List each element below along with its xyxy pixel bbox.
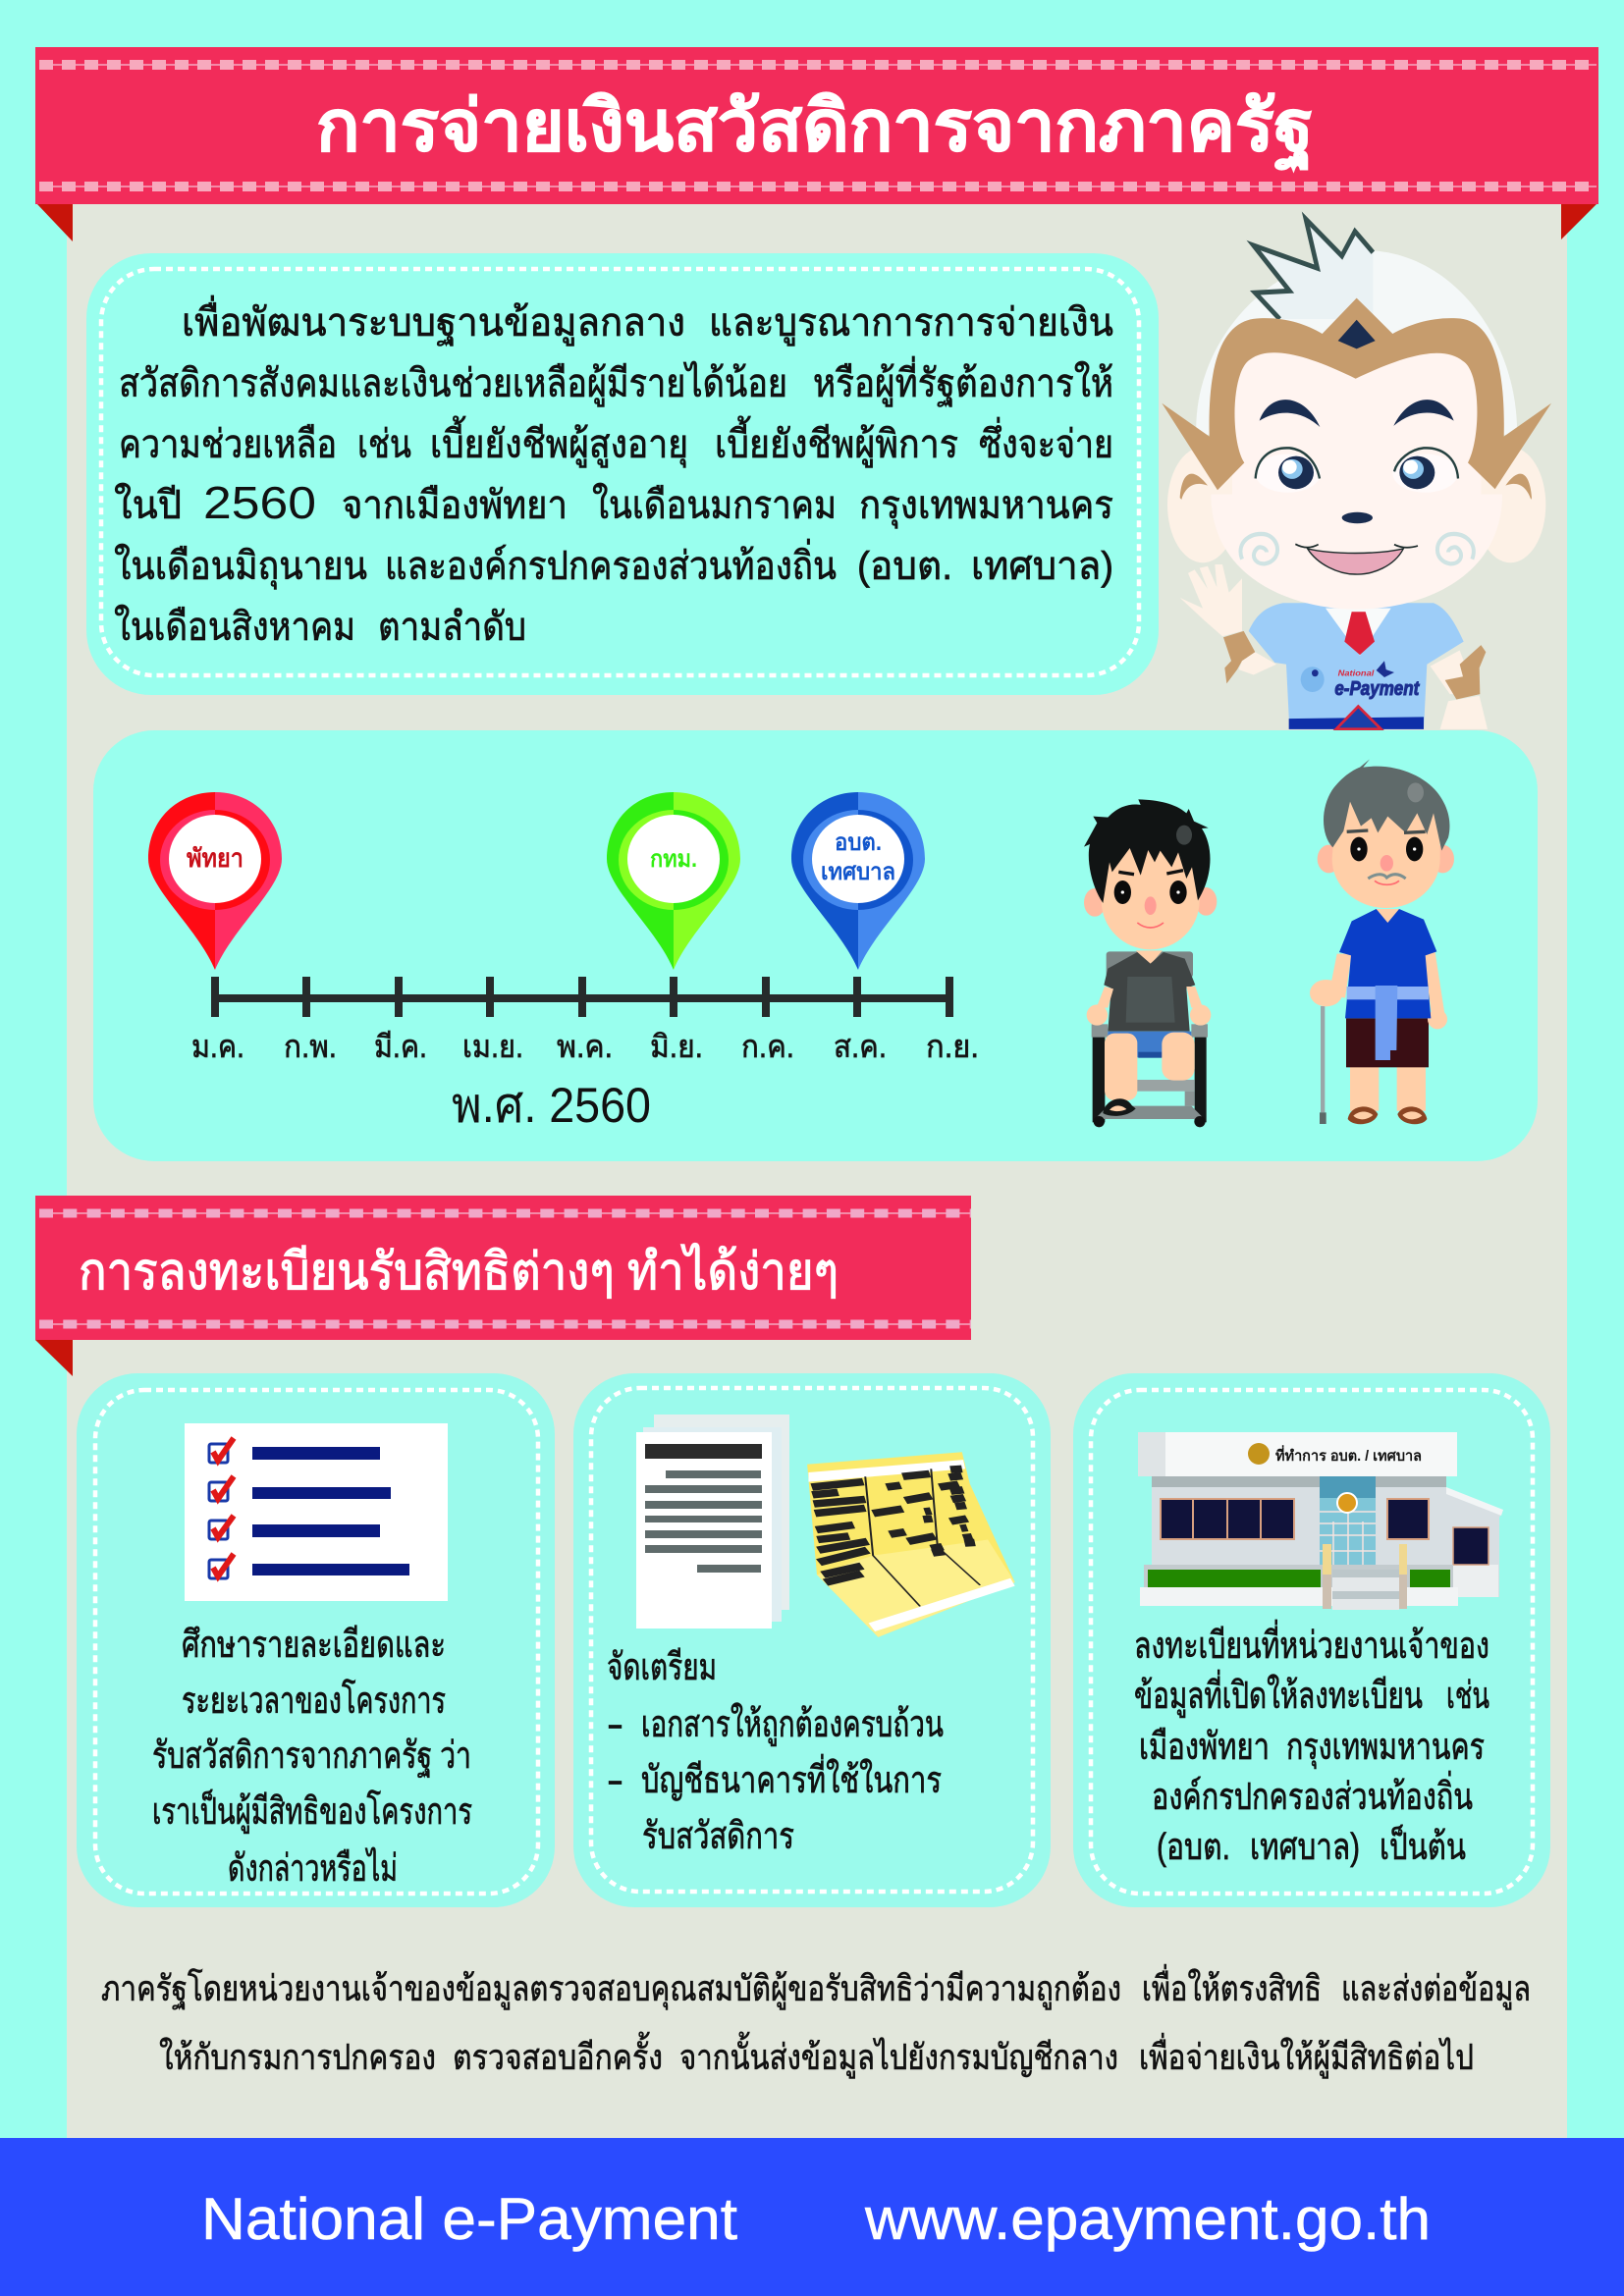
- introduction text: ในเดือนมกราคม: [592, 482, 837, 527]
- month labels: พ.ค.: [557, 1029, 613, 1064]
- introduction text: 2560: [203, 477, 316, 528]
- elderly man with cane: [1310, 759, 1454, 1124]
- month labels: ก.พ.: [284, 1029, 337, 1064]
- month labels: เม.ย.: [462, 1029, 523, 1064]
- month labels: ก.ค.: [741, 1029, 794, 1064]
- title banner: [35, 47, 1598, 241]
- footer website: www.epayment.go.th: [864, 2186, 1431, 2252]
- panel: prepare documents: [573, 1373, 1051, 1907]
- closing paragraph: ตรวจสอบอีกครั้ง: [453, 2031, 663, 2077]
- pin: Pattaya, January: [148, 792, 282, 970]
- month labels: ส.ค.: [834, 1029, 887, 1064]
- register at agency text: เป็นต้น: [1380, 1824, 1466, 1868]
- section heading: การลงทะเบียนรับสิทธิต่างๆ ทำได้ง่ายๆ: [79, 1243, 839, 1301]
- study details text: เราเป็นผู้มีสิทธิของโครงการ: [152, 1789, 472, 1834]
- introduction text: เบี้ยยังชีพผู้สูงอายุ: [430, 415, 688, 468]
- month labels: ก.ย.: [926, 1029, 979, 1064]
- prepare documents text: บัญชีธนาคารที่ใช้ในการ: [641, 1754, 942, 1801]
- month labels: ม.ค.: [191, 1029, 244, 1064]
- mascot character: [1162, 219, 1551, 729]
- mascot other arm: [1431, 645, 1488, 729]
- icon: municipal office building: [1138, 1432, 1503, 1610]
- mascot hand: [1180, 564, 1276, 683]
- introduction text: กรุงเทพมหานคร: [859, 484, 1113, 529]
- introduction text: ในเดือนสิงหาคม: [114, 604, 355, 649]
- month labels: [191, 1029, 979, 1064]
- introduction text: เช่น: [357, 423, 411, 466]
- mascot logo: e-Payment: [1334, 677, 1420, 700]
- register at agency text: เทศบาล): [1250, 1827, 1360, 1868]
- register at agency text: ข้อมูลที่เปิดให้ลงทะเบียน: [1134, 1670, 1423, 1718]
- panel: study details: [77, 1373, 555, 1907]
- month labels: มิ.ย.: [650, 1029, 703, 1064]
- introduction text: เพื่อพัฒนาระบบฐานข้อมูลกลาง: [182, 295, 685, 347]
- pin: Bangkok, June: กทม.: [650, 846, 697, 873]
- title text: การจ่ายเงินสวัสดิการจากภาครัฐ: [316, 87, 1314, 172]
- year label: พ.ศ. 2560: [452, 1078, 651, 1133]
- introduction text: ความช่วยเหลือ: [119, 423, 337, 466]
- introduction text: สวัสดิการสังคมและเงินช่วยเหลือผู้มีรายได้น้อย: [119, 361, 787, 406]
- study details text: รับสวัสดิการจากภาครัฐ ว่า: [152, 1735, 471, 1778]
- register at agency text: เมืองพัทยา: [1139, 1727, 1270, 1768]
- prepare documents text: -: [607, 1704, 623, 1745]
- introduction text: ซึ่งจะจ่าย: [979, 417, 1113, 466]
- introduction text: เทศบาล): [971, 545, 1113, 588]
- register at agency text: (อบต.: [1157, 1827, 1230, 1868]
- mascot shirt: National: [1338, 667, 1375, 678]
- closing paragraph: และส่งต่อข้อมูล: [1341, 1968, 1531, 2010]
- mascot shirt: [1249, 603, 1464, 729]
- month labels: มี.ค.: [374, 1029, 427, 1064]
- prepare documents text: [607, 1647, 944, 1857]
- panel: introduction: [86, 253, 1159, 695]
- introduction text: เบี้ยยังชีพผู้พิการ: [715, 415, 958, 467]
- introduction text: และบูรณาการการจ่ายเงิน: [709, 301, 1113, 346]
- study details text: [152, 1625, 472, 1890]
- closing paragraph: เพื่อจ่ายเงินให้ผู้มีสิทธิต่อไป: [1139, 2033, 1474, 2079]
- prepare documents text: เอกสารให้ถูกต้องครบถ้วน: [641, 1703, 944, 1746]
- register at agency text: เช่น: [1446, 1676, 1489, 1717]
- mascot crown: [1162, 298, 1551, 500]
- closing paragraph: [101, 1964, 1531, 2079]
- register at agency text: กรุงเทพมหานคร: [1286, 1727, 1485, 1769]
- pin: Bangkok, June: [607, 792, 740, 970]
- study details text: ศึกษารายละเอียดและ: [182, 1625, 446, 1666]
- icon: bank book: [807, 1452, 1015, 1637]
- timeline axis: [211, 977, 953, 1017]
- pin: Pattaya, January: พัทยา: [187, 843, 244, 873]
- register at agency text: ลงทะเบียนที่หน่วยงานเจ้าของ: [1134, 1620, 1489, 1667]
- icon: checklist: [185, 1423, 448, 1601]
- prepare documents text: -: [607, 1760, 623, 1801]
- prepare documents text: รับสวัสดิการ: [642, 1816, 794, 1857]
- introduction text: [114, 295, 1113, 649]
- panel: timeline: [93, 730, 1538, 1161]
- icon: document stack: [636, 1415, 789, 1629]
- mascot nose and mouth: [1240, 512, 1474, 574]
- closing paragraph: ภาครัฐโดยหน่วยงานเจ้าของข้อมูลตรวจสอบคุณสมบัติผู้ขอรับสิทธิว่ามีความถูกต้อง: [101, 1968, 1121, 2010]
- closing paragraph: ให้กับกรมการปกครอง: [159, 2037, 436, 2077]
- building sign text: ที่ทำการ อบต. / เทศบาล: [1275, 1445, 1422, 1465]
- introduction text: จากเมืองพัทยา: [342, 484, 568, 527]
- register at agency text: [1134, 1620, 1489, 1868]
- footer bar: [0, 2138, 1624, 2296]
- register at agency text: องค์กรปกครองส่วนท้องถิ่น: [1152, 1771, 1473, 1818]
- person in wheelchair: [1084, 799, 1217, 1127]
- introduction text: ตามลำดับ: [378, 606, 526, 649]
- study details text: ระยะเวลาของโครงการ: [182, 1679, 446, 1722]
- panel: register at agency: [1073, 1373, 1550, 1907]
- introduction text: ในปี: [114, 482, 182, 527]
- pin: local authorities, August: อบต.: [835, 829, 882, 856]
- section banner: registration: [35, 1196, 971, 1376]
- mascot eyes and brows: [1255, 400, 1458, 493]
- closing paragraph: จากนั้นส่งข้อมูลไปยังกรมบัญชีกลาง: [679, 2031, 1118, 2079]
- introduction text: หรือผู้ที่รัฐต้องการให้: [813, 356, 1113, 407]
- pin: local authorities, August: เทศบาล: [821, 859, 895, 885]
- introduction text: และองค์กรปกครองส่วนท้องถิ่น: [385, 539, 837, 588]
- introduction text: ในเดือนมิถุนายน: [114, 543, 367, 590]
- pin: local authorities, August: [791, 792, 925, 970]
- introduction text: (อบต.: [857, 545, 952, 588]
- footer name: National e-Payment: [201, 2186, 737, 2252]
- study details text: ดังกล่าวหรือไม่: [228, 1847, 398, 1890]
- mascot face: [1211, 347, 1502, 610]
- prepare documents text: จัดเตรียม: [607, 1647, 717, 1688]
- mascot ears: [1167, 447, 1545, 562]
- closing paragraph: เพื่อให้ตรงสิทธิ: [1142, 1964, 1322, 2008]
- mascot white hair: [1196, 219, 1517, 435]
